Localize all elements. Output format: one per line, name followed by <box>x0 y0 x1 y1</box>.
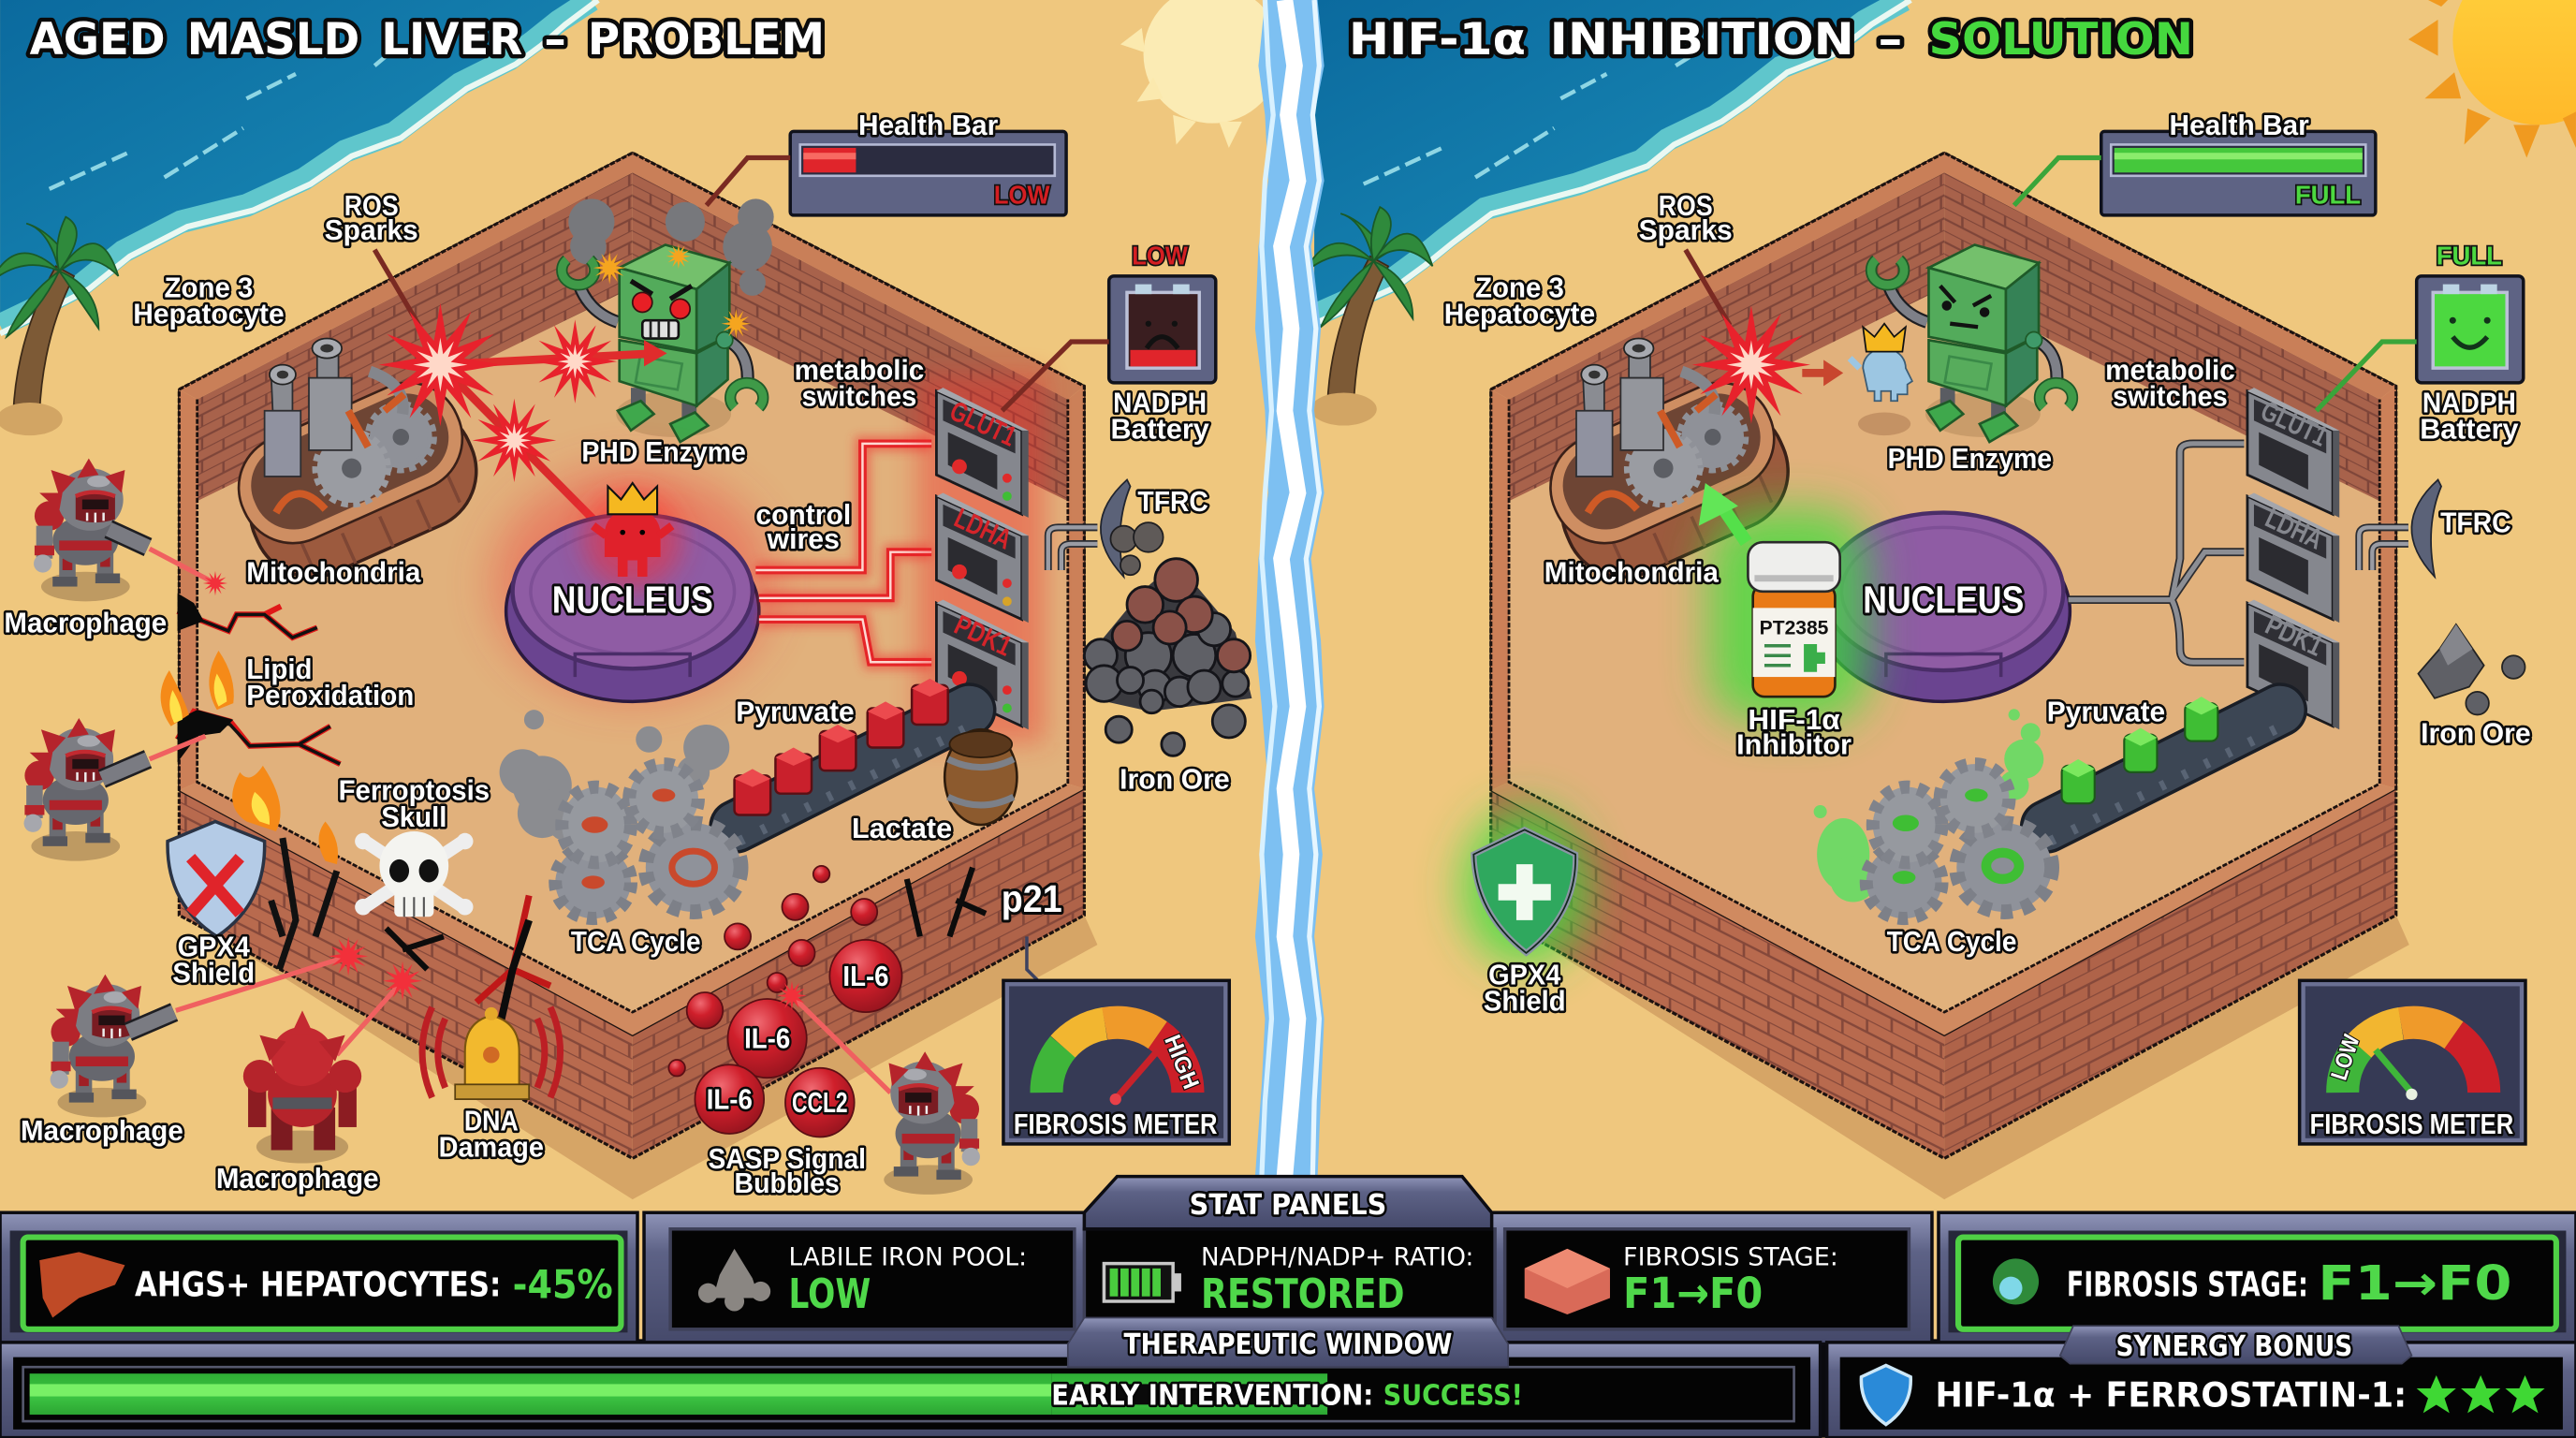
labels: left scene: Pyruvate <box>736 695 855 727</box>
labels: right scene: switches <box>2113 379 2228 412</box>
macrophages with laser beams <box>24 459 980 1195</box>
deposed HIF-1 alpha creature: blue <box>1850 324 1912 435</box>
palm tree: right <box>1305 207 1432 426</box>
icon: blue shield <box>1861 1365 1910 1425</box>
labels: left scene: switches <box>802 379 916 412</box>
mitochondria: right <box>1533 339 1807 596</box>
stat: NADPH/NADP+ ratio <box>1084 1229 1495 1329</box>
labels: left scene <box>4 109 1230 1199</box>
labels: left scene: TFRC <box>1137 485 1208 518</box>
panel: AHGS+ hepatocytes stat: -45% <box>513 1261 613 1307</box>
hexagonal hepatocyte room: right <box>1491 153 2409 1199</box>
stat: NADPH/NADP+ ratio: RESTORED <box>1201 1270 1405 1318</box>
labels: left scene: Hepatocyte <box>133 298 285 330</box>
stat: labile iron pool <box>670 1229 1075 1329</box>
health bar: full: FULL <box>2295 181 2361 210</box>
labels: left scene: Bubbles <box>735 1167 840 1199</box>
metabolic switch panels: active <box>916 374 1045 742</box>
labels: right scene: FIBROSIS METER <box>2310 1108 2513 1140</box>
icon: liver <box>39 1252 124 1318</box>
fibrosis meter: high: HIGH <box>1159 1032 1204 1093</box>
TCA cycle gears with smoke <box>500 710 741 918</box>
panel: fibrosis stage stat, solution: FIBROSIS STAGE: <box>2067 1265 2308 1305</box>
nucleus with HIF-1 alpha king: left <box>493 468 772 701</box>
labels: left scene: GPX4 <box>178 930 250 962</box>
panel: therapeutic window bar: EARLY INTERVENTION: <box>1051 1380 1373 1413</box>
labels: left scene: metabolic <box>795 353 924 386</box>
SASP signal bubbles <box>668 866 902 1137</box>
ROS sparks: left <box>374 250 667 529</box>
labels: right scene: Pyruvate <box>2047 695 2165 727</box>
iron ore pile <box>1084 559 1251 756</box>
title: solution: HIF-1α INHIBITION – <box>1349 14 1902 66</box>
membrane cracks, lipid peroxidation and flames <box>178 594 986 1051</box>
tab: stat panels: STAT PANELS <box>1190 1189 1386 1222</box>
labels: right scene: Hepatocyte <box>1444 298 1595 330</box>
HIF-1 alpha inhibitor pill bottle <box>1699 483 1869 723</box>
health bar: full <box>2014 131 2376 215</box>
labels: right scene: NUCLEUS <box>1863 579 2024 622</box>
stat: NADPH/NADP+ ratio: NADPH/NADP+ RATIO: <box>1201 1243 1473 1271</box>
control wires: grey <box>2069 444 2244 662</box>
labels: left scene: Zone 3 <box>165 271 253 304</box>
panel: HIF-1 alpha inhibition solution scene <box>1444 109 2531 1199</box>
panel: central stat panels <box>644 1212 1932 1344</box>
title: solution <box>1349 14 2193 66</box>
lactate barrel <box>944 729 1017 825</box>
GPX4 shield: active <box>1462 808 1587 966</box>
mitochondria: damaged <box>222 339 495 596</box>
labels: left scene: Macrophage <box>21 1114 183 1147</box>
labels: left scene: TCA Cycle <box>571 925 701 958</box>
SASP signal bubbles: IL-6 <box>842 960 889 992</box>
central lightning divider <box>1255 0 1325 1177</box>
labels: right scene: Iron Ore <box>2421 716 2531 749</box>
tab: synergy bonus: SYNERGY BONUS <box>2116 1330 2352 1363</box>
labels: right scene <box>1444 109 2531 1140</box>
labels: right scene: ROS <box>1659 189 1713 222</box>
NADPH battery: full: FULL <box>2437 242 2502 271</box>
tab: therapeutic window <box>1068 1318 1508 1367</box>
labels: left scene: Shield <box>172 957 255 990</box>
panel: therapeutic window bar: SUCCESS! <box>1383 1380 1523 1413</box>
icon: fibrosis orb <box>1993 1258 2039 1304</box>
labels: left scene: NUCLEUS <box>552 579 713 622</box>
labels: left scene: Macrophage <box>4 607 167 639</box>
tab: stat panels <box>1084 1177 1492 1229</box>
title: problem: AGED MASLD LIVER – PROBLEM <box>30 14 825 66</box>
labels: left scene: Lactate <box>852 812 952 844</box>
labels: left scene: Ferroptosis <box>339 774 490 807</box>
fibrosis meter: high <box>1003 936 1229 1143</box>
labels: left scene: wires <box>767 522 840 555</box>
HIF-1 alpha inhibitor pill bottle: PT2385 <box>1760 617 1829 638</box>
labels: left scene: DNA <box>464 1104 519 1137</box>
tab: synergy bonus <box>2060 1326 2411 1364</box>
metabolic switch panels: inactive: PDK1 <box>2261 609 2327 663</box>
stat: labile iron pool: LOW <box>788 1270 871 1318</box>
labels: right scene: Battery <box>2420 413 2519 446</box>
labels: right scene: Sparks <box>1639 213 1733 246</box>
SASP signal bubbles: CCL2 <box>792 1086 848 1119</box>
fibrosis meter: low: LOW <box>2327 1031 2365 1083</box>
labels: left scene: NADPH <box>1113 387 1207 419</box>
metabolic switch panels: inactive: GLUT1 <box>2256 395 2332 452</box>
stat: fibrosis stage: FIBROSIS STAGE: <box>1623 1243 1838 1271</box>
flames <box>161 651 338 864</box>
title: solution: SOLUTION <box>1928 14 2193 66</box>
labels: left scene: Lipid <box>246 653 313 685</box>
ocean and shoreline: left scene <box>0 0 598 333</box>
palm tree: left <box>0 217 118 435</box>
labels: right scene: Shield <box>1484 984 1566 1017</box>
labels: right scene: GPX4 <box>1488 958 1560 990</box>
ROS spark blocked with arrow <box>1686 250 1843 424</box>
SASP signal bubbles: IL-6 <box>707 1083 753 1116</box>
metabolic switch panels: active: GLUT1 <box>945 395 1020 452</box>
hexagonal hepatocyte room: left <box>179 153 1097 1199</box>
nucleus: right <box>1817 513 2070 701</box>
labels: right scene: Mitochondria <box>1544 555 1720 588</box>
metabolic switch panels: inactive: LDHA <box>2261 503 2327 556</box>
panel: fibrosis stage stat, solution <box>1939 1212 2576 1344</box>
labels: right scene: TFRC <box>2440 506 2511 539</box>
panel: synergy bonus <box>1827 1343 2576 1438</box>
labels: right scene: PHD Enzyme <box>1888 442 2052 475</box>
control wires: red <box>755 444 931 662</box>
labels: left scene: Iron Ore <box>1120 762 1230 795</box>
panel: synergy bonus: HIF-1α + FERROSTATIN-1: <box>1935 1374 2407 1415</box>
fibrosis meter: low <box>2300 981 2525 1143</box>
ocean and shoreline: right scene <box>1314 0 1910 324</box>
SASP signal bubbles: IL-6 <box>744 1022 790 1055</box>
stat: fibrosis stage <box>1505 1229 1909 1329</box>
sun: right bright <box>2408 0 2576 157</box>
labels: left scene: p21 <box>1002 877 1062 920</box>
panel: fibrosis stage stat, solution: F1→F0 <box>2318 1256 2511 1312</box>
labels: left scene: Mitochondria <box>246 555 421 588</box>
stat: fibrosis stage: F1→F0 <box>1623 1269 1763 1318</box>
labels: right scene: NADPH <box>2422 387 2516 419</box>
metabolic switch panels: active: PDK1 <box>949 609 1017 663</box>
icon: three stars <box>2417 1375 2545 1413</box>
ferroptosis skull <box>355 831 474 917</box>
labels: left scene: Battery <box>1110 413 1209 446</box>
labels: left scene: PHD Enzyme <box>581 435 746 468</box>
labels: left scene: Skull <box>381 800 446 833</box>
TFRC receptor: right <box>2359 479 2441 577</box>
labels: left scene: FIBROSIS METER <box>1014 1108 1218 1140</box>
labels: left scene: Macrophage <box>216 1162 379 1195</box>
pyruvate conveyor with green cubes <box>2047 697 2289 842</box>
labels: left scene: control <box>755 498 851 531</box>
labels: left scene: ROS <box>344 189 399 222</box>
panel: AHGS+ hepatocytes stat <box>0 1212 637 1344</box>
sun: left pale <box>1120 0 1281 148</box>
panel: aged MASLD liver problem scene <box>4 109 1251 1199</box>
PHD enzyme robot: healthy <box>1871 244 2072 442</box>
DNA damage bell with alarm waves <box>422 1007 561 1099</box>
pyruvate conveyor with red cubes <box>735 679 977 842</box>
labels: left scene: Damage <box>439 1131 544 1164</box>
panel: AHGS+ hepatocytes stat: AHGS+ HEPATOCYTES: <box>135 1265 501 1305</box>
NADPH battery: low <box>1003 242 1216 411</box>
labels: left scene: Health Bar <box>858 109 998 141</box>
labels: left scene: Peroxidation <box>246 679 414 712</box>
metabolic switch panels: inactive <box>2247 388 2339 729</box>
panel: therapeutic window bar <box>0 1343 1821 1438</box>
PHD enzyme robot: damaged <box>562 198 774 442</box>
metabolic switch panels: active: LDHA <box>949 503 1017 556</box>
labels: right scene: Zone 3 <box>1475 271 1564 304</box>
HUD: bottom dashboard <box>0 1177 2576 1438</box>
labels: right scene: metabolic <box>2105 353 2235 386</box>
TCA cycle gears: restored <box>1814 709 2052 918</box>
health bar: low: LOW <box>994 181 1050 210</box>
health bar: low <box>707 131 1066 215</box>
labels: left scene: SASP Signal <box>708 1142 866 1175</box>
stat: labile iron pool: LABILE IRON POOL: <box>788 1243 1027 1271</box>
labels: left scene: Sparks <box>325 213 418 246</box>
TFRC receptor with iron <box>1048 479 1164 577</box>
labels: right scene: HIF-1α <box>1748 703 1840 736</box>
GPX4 shield: broken <box>168 822 265 936</box>
labels: right scene: Health Bar <box>2170 109 2309 141</box>
labels: right scene: TCA Cycle <box>1887 925 2016 958</box>
NADPH battery: low: LOW <box>1132 242 1188 271</box>
NADPH battery: full <box>2317 242 2524 411</box>
tab: therapeutic window: THERAPEUTIC WINDOW <box>1123 1328 1453 1361</box>
iron ore: small <box>2418 624 2525 714</box>
labels: right scene: Inhibitor <box>1736 728 1852 761</box>
